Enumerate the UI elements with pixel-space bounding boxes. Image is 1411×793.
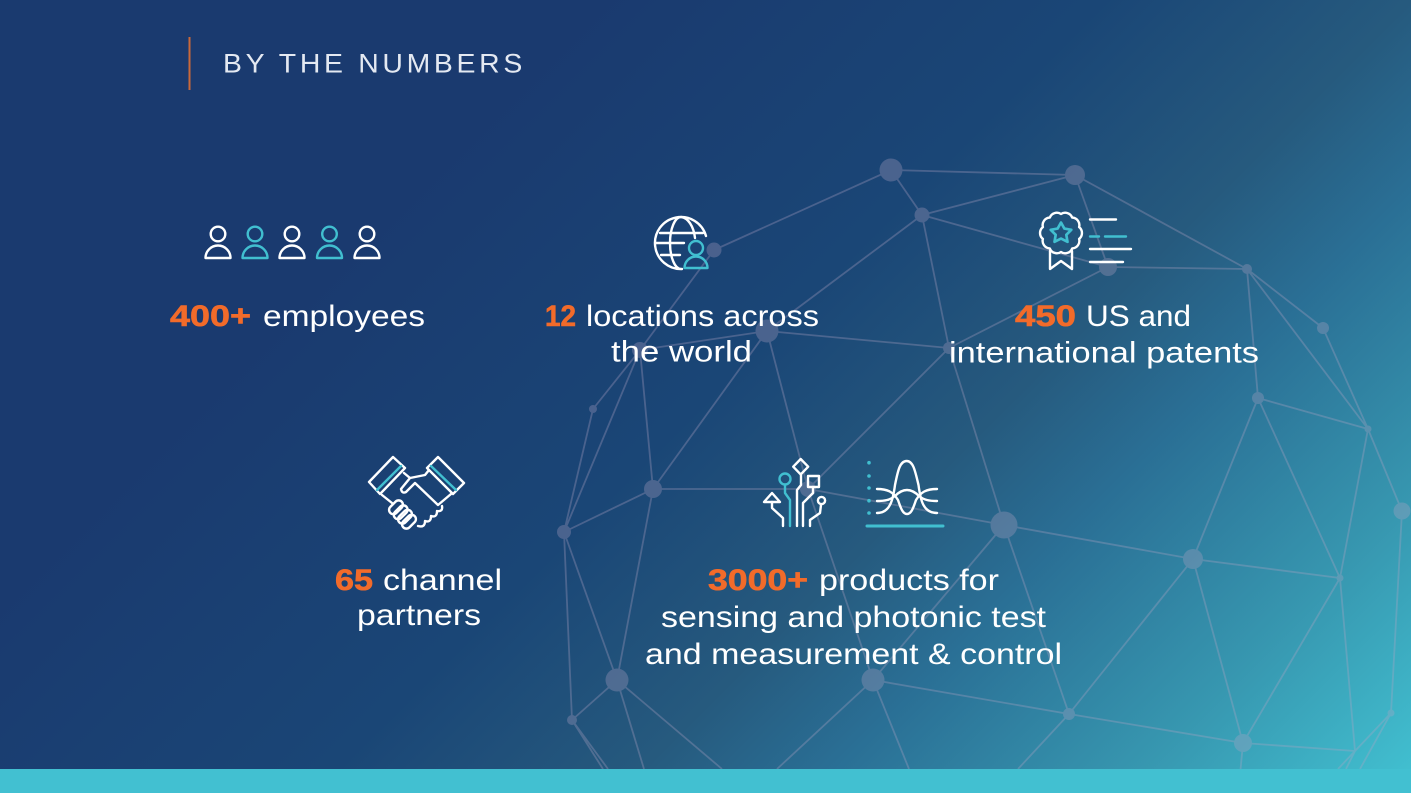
icon: circuit traces <box>764 459 825 526</box>
panel: locations <box>545 217 819 368</box>
icon: award rosette with lines <box>1040 213 1131 269</box>
icon: handshake <box>369 457 464 530</box>
title: BY THE NUMBERS <box>223 48 526 78</box>
stat text: 65 channel partners: channel <box>383 564 502 597</box>
panel: channel partners <box>335 457 502 632</box>
stat text: 12 locations across the world: 12 <box>545 300 576 333</box>
icon: five people <box>206 227 380 258</box>
icon: globe with person <box>655 217 708 269</box>
panel: patents <box>949 213 1259 370</box>
stat text: 65 channel partners: partners <box>357 599 481 632</box>
stat text: 400+ employees: 400+ <box>170 300 251 333</box>
stat text: 3000+ products: sensing and photonic test <box>661 601 1047 634</box>
stat text: 12 locations across the world: the world <box>611 336 752 368</box>
stat text: 450 US and international patents: 450 <box>1015 300 1076 333</box>
stat text: 3000+ products <box>645 564 1062 671</box>
stat text: 65 channel partners: 65 <box>335 564 373 597</box>
stat text: 3000+ products: 3000+ <box>708 564 808 597</box>
stat text: 450 US and international patents <box>949 300 1259 370</box>
stat text: 400+ employees: employees <box>263 300 425 333</box>
panel: employees <box>170 227 425 333</box>
stat text: 3000+ products: and measurement & control <box>645 638 1062 671</box>
stat text: 65 channel partners <box>335 564 502 632</box>
stat text: 450 US and international patents: US and <box>1086 300 1191 333</box>
header accent rule <box>188 37 190 90</box>
bottom teal bar <box>0 769 1411 793</box>
stat text: 400+ employees <box>170 300 425 333</box>
stat text: 12 locations across the world <box>545 300 819 368</box>
icon: bell curves chart <box>867 461 943 526</box>
stat text: 3000+ products: products for <box>819 564 999 597</box>
network globe mesh <box>557 158 1410 775</box>
stat text: 12 locations across the world: locations across <box>586 300 819 333</box>
panel: products <box>645 459 1062 671</box>
stat text: 450 US and international patents: international patents <box>949 336 1259 370</box>
